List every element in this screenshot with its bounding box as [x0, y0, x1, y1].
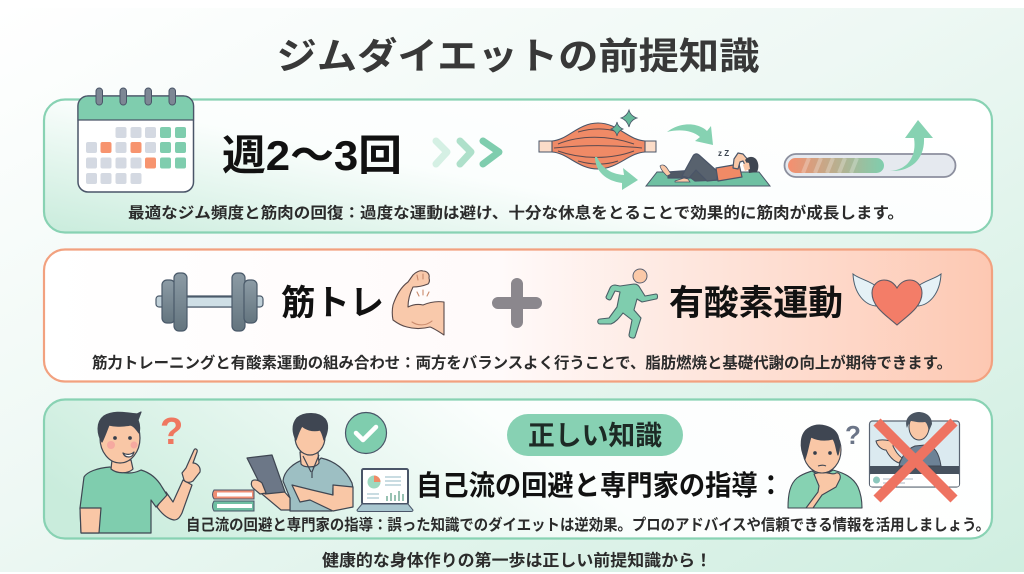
heading: aerobic exercise: 有酸素運動: [669, 284, 843, 323]
badge: correct knowledge: 正しい知識: [528, 421, 662, 451]
icon: question mark: ?: [160, 411, 183, 453]
icon: red cross: [877, 422, 954, 499]
icon: flexed arm: [392, 271, 444, 335]
illustration: confused man: [788, 425, 862, 508]
title: ジムダイエットの前提知識: [276, 36, 760, 77]
caption: combination: 筋力トレーニングと有酸素運動の組み合わせ：両方をバランスよく行うことで、脂肪燃焼と基礎代謝の向上が期待できます。: [92, 353, 952, 372]
badge: correct knowledge: [507, 414, 683, 456]
icon: check badge: [346, 412, 386, 454]
illustration: crossed-out video: [870, 412, 960, 499]
icon: dumbbell: [156, 273, 263, 331]
panel: combination: [44, 250, 992, 382]
icon: zzz: z Z: [718, 149, 729, 158]
heading: frequency: 週2〜3回: [222, 132, 402, 179]
arrow: muscle to rest: [595, 124, 713, 190]
panel: workout frequency: [44, 88, 992, 232]
icon: small question mark: ?: [845, 420, 861, 450]
icon: books: [212, 490, 254, 511]
icon: laptop dashboard: [357, 469, 413, 512]
arrow: growth: [890, 120, 933, 171]
caption: frequency: 最適なジム頻度と筋肉の回復：過度な運動は避け、十分な休息をとることで効果的に筋肉が成長します。: [128, 203, 904, 222]
icon: sparkles: [611, 110, 637, 136]
heading: strength training: 筋トレ: [281, 284, 384, 323]
icon: resting person on mat: [646, 149, 770, 186]
icon: runner: [598, 269, 658, 338]
heading: avoid self-teaching: 自己流の回避と専門家の指導：: [416, 470, 784, 501]
icon: muscle: [539, 123, 656, 169]
icon: calendar: [78, 88, 194, 192]
progress bar: [784, 154, 956, 177]
icon: plus: [498, 284, 536, 322]
panel: correct knowledge: [44, 400, 992, 538]
footer message: 健康的な身体作りの第一歩は正しい前提知識から！: [322, 550, 712, 570]
icon: chevrons: [436, 141, 499, 164]
illustration: pointing man: [80, 412, 200, 533]
icon: winged heart: [853, 274, 941, 325]
illustration: trainer with tablet: [247, 414, 353, 511]
